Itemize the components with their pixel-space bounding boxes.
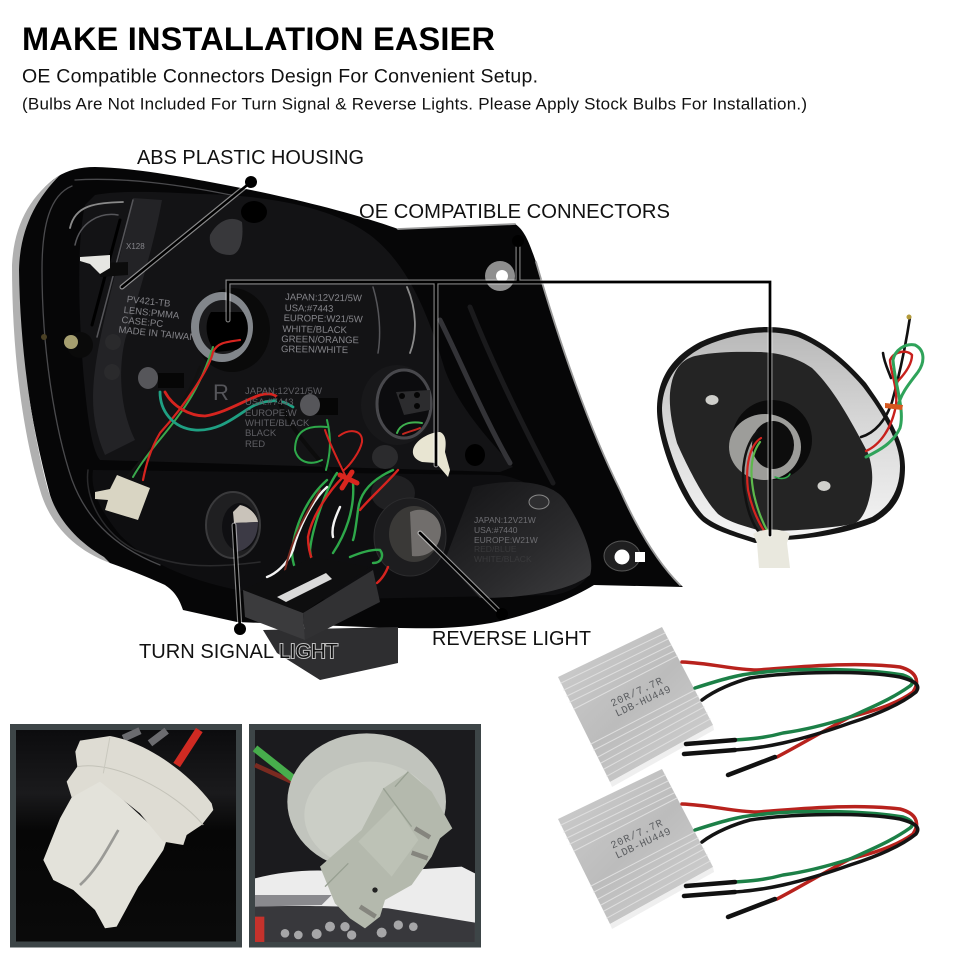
heat sink ribs: [561, 633, 710, 776]
label: turn signal light: TURN SIGNAL LIGHT: [139, 640, 338, 663]
socket body: [43, 778, 167, 928]
module body: [558, 627, 713, 782]
silver socket ring: [729, 414, 801, 480]
socket disc: [304, 762, 436, 868]
resistor 1 marking: LDB-HU449: [614, 684, 673, 720]
embossed text: part data: CASE:PC: [121, 315, 164, 330]
embossed text: upper socket: JAPAN:12V21/5W: [285, 292, 362, 304]
embossed text: reverse socket: [474, 515, 538, 564]
embossed text: middle socket: USA:#7443: [245, 397, 294, 408]
lower cavity: [92, 470, 591, 600]
upper bulb socket: [191, 288, 270, 372]
right white connector: [413, 432, 450, 477]
dark wires: [123, 731, 167, 743]
output leads: [682, 662, 918, 775]
embossed text: upper socket: GREEN/WHITE: [281, 344, 348, 356]
embossed text: middle socket: [245, 386, 322, 450]
reflector oval mark: [529, 495, 549, 509]
embossed text: reverse socket: USA:#7440: [474, 525, 518, 535]
lower reflector: [445, 482, 591, 598]
white bulb connector: [753, 530, 790, 568]
wires: [255, 765, 292, 782]
terminal wire: [80, 830, 118, 885]
foam gasket pad: [670, 352, 872, 531]
embossed text: reverse socket: EUROPE:W21W: [474, 535, 538, 545]
cavity glare column: [93, 198, 162, 455]
turn signal socket: [206, 492, 260, 558]
embossed text: upper socket: USA:#7443: [285, 303, 333, 315]
embossed text: reverse socket: RED/BLUE: [474, 544, 517, 554]
embossed text: middle socket: JAPAN:12V21/5W: [245, 386, 322, 397]
small rear lamp with connector: [657, 314, 923, 568]
cavity highlights and ribs: [70, 202, 415, 353]
embossed text: part data: MADE IN TAIWAN: [118, 325, 197, 344]
embossed text: middle socket: BLACK: [245, 428, 277, 439]
socket flange: [287, 733, 446, 870]
embossed text: middle socket: WHITE/BLACK: [245, 418, 310, 429]
mounting tab: [485, 261, 515, 291]
heat sink ribs: [561, 775, 710, 918]
wiring harness: [127, 340, 422, 587]
subtitle: OE Compatible Connectors Design For Convenient Setup.: [22, 66, 538, 88]
embossed text: middle socket: RED: [245, 439, 265, 450]
silver outer rim: [12, 175, 110, 563]
installation note: (Bulbs Are Not Included For Turn Signal & Reverse Lights. Please Apply Stock Bulbs For Installation.): [22, 94, 807, 114]
socket flange: [67, 736, 213, 845]
embossed text: part data: LENS:PMMA: [123, 305, 180, 322]
outer gloss lines: [42, 179, 240, 565]
side wire bundle: [861, 314, 923, 457]
main tail light housing: [12, 167, 683, 680]
embossed text: mold mark: X128: [126, 242, 145, 251]
embossed text: part data: [118, 294, 200, 344]
embossed text: upper socket: GREEN/ORANGE: [281, 334, 359, 346]
resistor module 1: [558, 627, 918, 787]
stud bolts: [41, 255, 128, 380]
outer black gasket: [657, 327, 905, 543]
photo panel: cream bulb socket: [10, 724, 242, 948]
chrome inner ring: [662, 332, 900, 539]
embossed text: middle socket: EUROPE:W: [245, 408, 297, 419]
red wire: [177, 730, 199, 765]
housing body: [18, 167, 683, 628]
label: OE compatible connectors: OE COMPATIBLE CONNECTORS: [359, 200, 670, 223]
resistor 2 marking: LDB-HU449: [614, 826, 673, 862]
bokeh dots: [281, 920, 418, 940]
lower mounting hole: [604, 541, 645, 571]
upper lens cavity: [79, 192, 513, 472]
connector body: [320, 772, 452, 928]
terminal pins: [360, 828, 430, 917]
callout dots: [234, 176, 524, 635]
embossed text: upper socket: [281, 292, 363, 356]
reverse light socket: [374, 498, 446, 576]
label: reverse light: REVERSE LIGHT: [432, 627, 591, 650]
load resistor box: [243, 557, 398, 680]
left wire connector: [95, 475, 150, 520]
photo panel: gray bulb socket: [249, 724, 481, 948]
embossed text: reverse socket: JAPAN:12V21W: [474, 515, 536, 525]
title: MAKE INSTALLATION EASIER: [22, 21, 495, 57]
right bulb socket: [361, 365, 433, 445]
embossed text: side marker R: R: [213, 380, 229, 405]
output leads: [682, 804, 918, 917]
resistor module 2: [558, 769, 918, 929]
resistor 2 marking: 20R/7.7R: [609, 817, 666, 852]
embossed text: reverse socket: WHITE/BLACK: [474, 554, 532, 564]
resistor 1 marking: 20R/7.7R: [609, 675, 666, 710]
module body: [558, 769, 713, 924]
callout lines: [122, 176, 770, 635]
embossed text: upper socket: WHITE/BLACK: [282, 324, 348, 336]
label: ABS plastic housing: ABS PLASTIC HOUSING: [137, 146, 364, 169]
embossed text: upper socket: EUROPE:W21/5W: [284, 313, 363, 325]
socket wires: [743, 432, 790, 533]
mounting bosses: [138, 201, 485, 511]
locating studs: [706, 395, 718, 405]
embossed text: part data: PV421-TB: [126, 294, 171, 310]
background table reflection: [255, 867, 475, 942]
socket recess: [732, 400, 812, 480]
